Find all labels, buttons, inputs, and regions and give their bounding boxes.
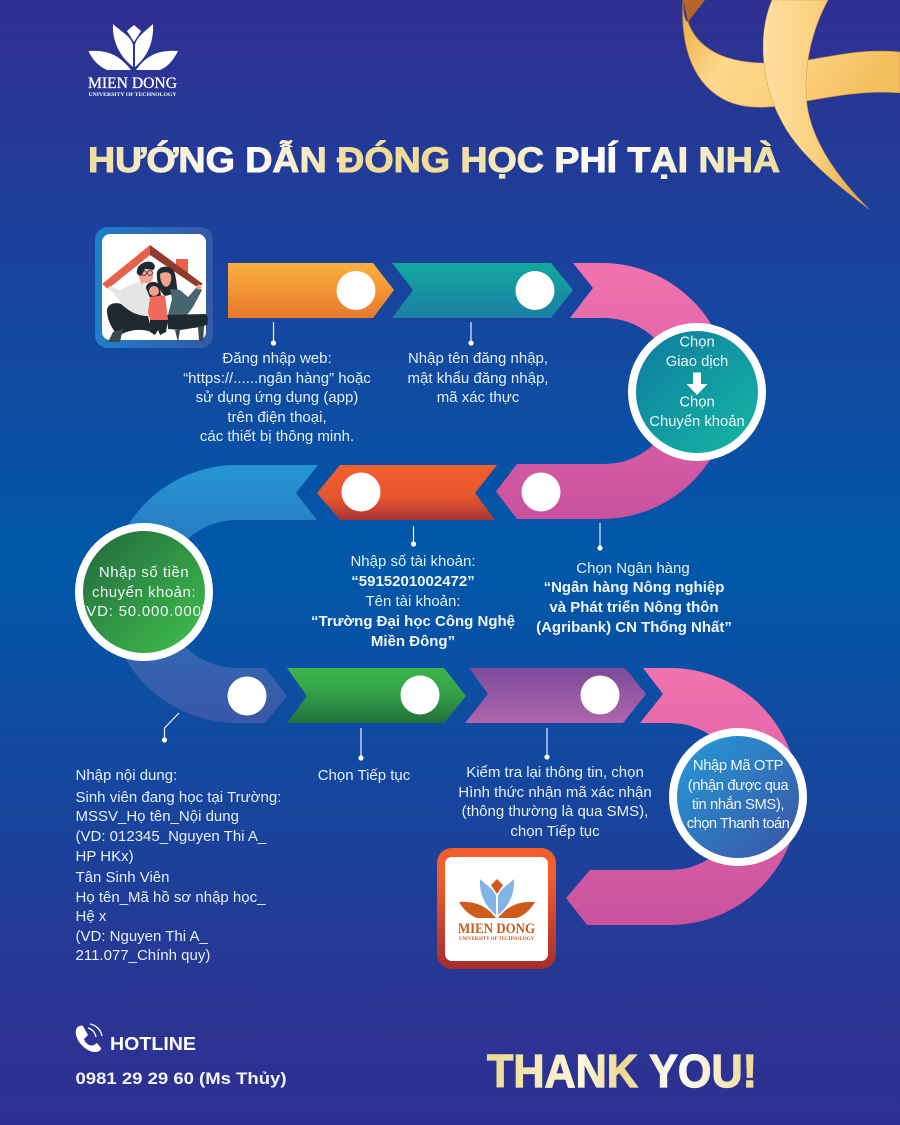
- text: step 9 verify: Kiểm tra lại thông tin, chọn: [466, 764, 644, 781]
- step 4 white dot: [522, 472, 560, 512]
- step 3 pink curved arrow: [496, 263, 730, 519]
- circle: enter OTP: (nhận được qua: [688, 778, 789, 794]
- leader line step 7: [162, 713, 179, 743]
- Mien Dong logo card: [437, 848, 556, 969]
- text: step 9 verify: [458, 764, 652, 840]
- text: step 7 content: (VD: 012345_Nguyen Thi A_: [76, 828, 267, 845]
- circle text giao dich: Giao dịch: [666, 354, 728, 370]
- text: step 2 credentials: mật khẩu đăng nhập,: [408, 370, 548, 387]
- child: [146, 282, 168, 335]
- leader line step 8: [358, 728, 364, 761]
- step 5 red arrow: [317, 465, 497, 520]
- step 1 orange arrow: [228, 263, 394, 318]
- circle: enter OTP: tin nhắn SMS),: [692, 796, 784, 813]
- roof: [102, 245, 203, 289]
- step 8 green arrow: [287, 668, 466, 723]
- circle: enter amount: [79, 527, 209, 657]
- text: step 7 content: [76, 767, 281, 964]
- amount text: (VD: 50.000.000): [80, 603, 208, 620]
- text: step 1 login: trên điện thoại,: [227, 409, 327, 426]
- card subtitle: UNIVERSITY OF TECHNOLOGY: [459, 937, 534, 942]
- hotline: [76, 1024, 286, 1088]
- step 9 purple arrow: [465, 668, 646, 723]
- leader line step 5: [411, 526, 416, 547]
- text: step 7 content: 211.077_Chính quy): [76, 947, 210, 964]
- family house icon card: [95, 227, 213, 348]
- text: step 5 account: Tên tài khoản:: [365, 593, 461, 610]
- amount text: chuyển khoản:: [92, 584, 196, 601]
- circle: select transaction: [632, 327, 762, 457]
- icon: phone: [76, 1024, 102, 1052]
- text: step 2 credentials: [408, 350, 548, 406]
- text: step 1 login: các thiết bị thông minh.: [200, 428, 354, 445]
- leader line step 9: [544, 728, 550, 760]
- circle text top: Chọn: [679, 334, 715, 350]
- text: step 5 account: “5915201002472”: [351, 573, 475, 590]
- leader line step 4: [597, 523, 603, 551]
- text: step 7 content: Hệ x: [76, 908, 107, 925]
- step 2 teal arrow: [392, 263, 573, 318]
- hotline number: 0981 29 29 60 (Ms Thủy): [76, 1069, 286, 1088]
- title: HƯỚNG DẪN ĐÓNG HỌC PHÍ TẠI NHÀ: [88, 140, 780, 180]
- text: step 9 verify: chọn Tiếp tục: [510, 823, 600, 840]
- text: step 4 bank: (Agribank) CN Thống Nhất”: [536, 619, 732, 636]
- text: step 7 content: MSSV_Họ tên_Nội dung: [76, 808, 239, 825]
- text: step 1 login: Đăng nhập web:: [222, 350, 332, 367]
- circle: enter OTP: chọn Thanh toán: [687, 816, 790, 832]
- text: step 4 bank: [536, 560, 732, 636]
- circle text choose: Chọn: [679, 394, 715, 410]
- text: step 5 account: [311, 553, 515, 650]
- icon: down arrow: [686, 372, 708, 395]
- card name: MIEN DONG: [458, 921, 535, 937]
- text: step 7 content: Nhập nội dung:: [76, 767, 177, 784]
- step 6 blue curved arrow: [108, 465, 318, 723]
- logo: Mien Dong University of Technology: [88, 24, 178, 98]
- text: step 8 continue: Chọn Tiếp tục: [318, 767, 411, 784]
- text: step 7 content: Họ tên_Mã hồ sơ nhập học_: [76, 889, 266, 906]
- text: step 4 bank: và Phát triển Nông thôn: [549, 599, 719, 616]
- amount text: [84, 566, 204, 616]
- lotus: [480, 879, 514, 915]
- amount text: Nhập số tiền: [99, 564, 189, 581]
- leader line step 2: [468, 322, 474, 346]
- text: step 9 verify: (thông thường là qua SMS),: [462, 803, 648, 820]
- leader line step 1: [271, 322, 276, 346]
- logo name: MIEN DONG: [88, 75, 177, 92]
- thank you: THANK YOU!: [487, 1045, 757, 1097]
- text: step 5 account: “Trường Đại học Công Nghệ: [311, 613, 515, 630]
- chimney: [176, 259, 188, 273]
- text: step 4 bank: “Ngân hàng Nông nghiệp: [544, 579, 724, 596]
- text: step 2 credentials: mã xác thực: [437, 389, 520, 406]
- text: step 7 content: Tân Sinh Viên: [76, 869, 169, 886]
- text: step 7 content: (VD: Nguyen Thi A_: [76, 928, 208, 945]
- text: step 1 login: [183, 350, 371, 445]
- circle: enter OTP: Nhập Mã OTP: [693, 758, 784, 774]
- text: step 5 account: Miền Đông”: [371, 633, 455, 650]
- logo subtitle: UNIVERSITY OF TECHNOLOGY: [88, 92, 176, 98]
- text: step 7 content: Sinh viên đang học tại Trường:: [76, 789, 281, 806]
- step 7 white dot: [228, 676, 266, 716]
- hotline label: HOTLINE: [110, 1034, 196, 1054]
- text: step 2 credentials: Nhập tên đăng nhập,: [408, 350, 548, 367]
- text: step 5 account: Nhập số tài khoản:: [350, 553, 476, 570]
- circle: enter OTP: [673, 732, 803, 862]
- text: step 1 login: sử dụng ứng dụng (app): [196, 389, 358, 406]
- text: step 9 verify: Hình thức nhận mã xác nhận: [458, 784, 652, 801]
- text: step 1 login: “https://......ngân hàng” hoặc: [183, 370, 371, 387]
- text: step 7 content: HP HKx): [76, 848, 134, 865]
- step 10 pink curved arrow: [566, 668, 798, 925]
- circle text transfer: Chuyển khoản: [649, 414, 745, 430]
- man: [107, 262, 155, 342]
- text: step 4 bank: Chọn Ngân hàng: [576, 560, 690, 577]
- gold ribbon decoration: [683, 0, 900, 209]
- woman: [157, 267, 208, 342]
- logo lotus mark: [88, 24, 178, 70]
